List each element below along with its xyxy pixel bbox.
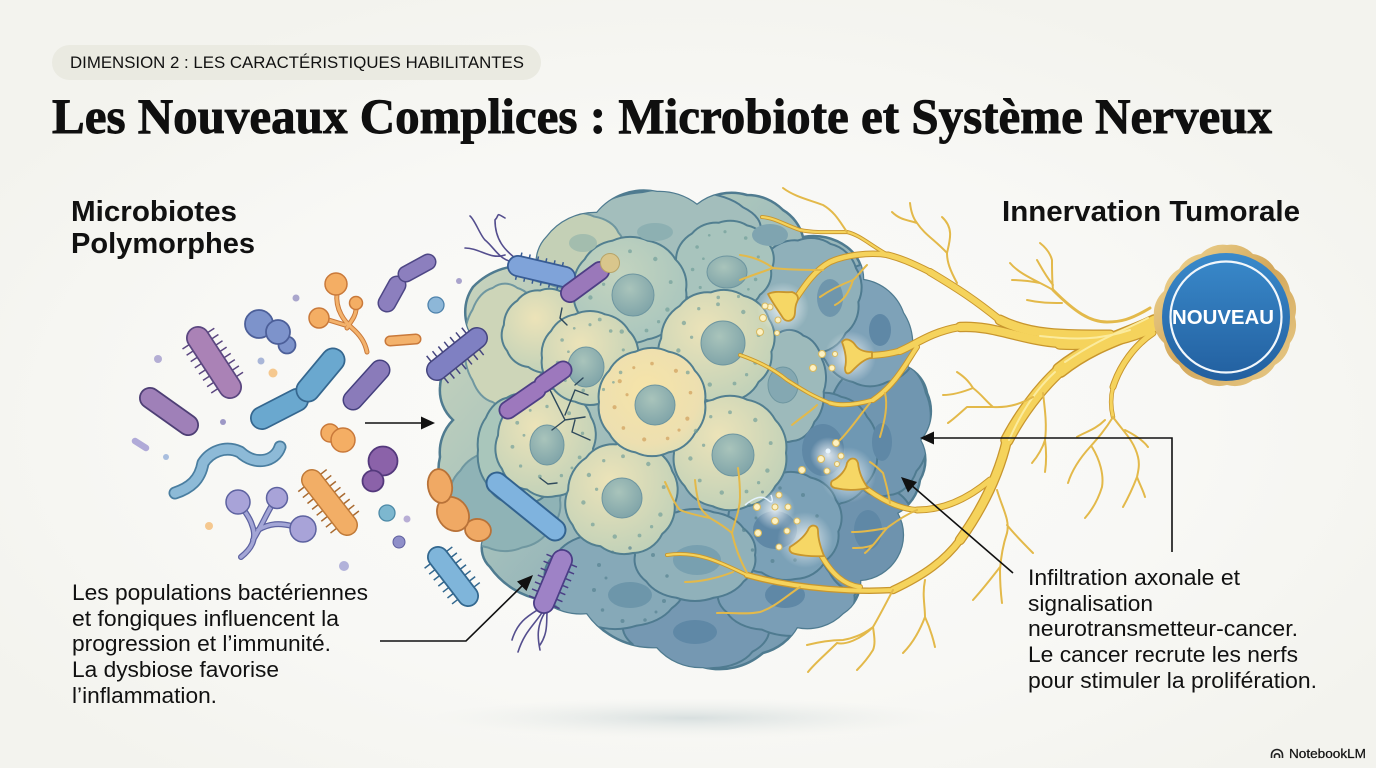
synapse glows [755,282,876,568]
purple rod on tumour [570,271,600,293]
nerve fill [667,217,1155,591]
text block: innervation: pour stimuler la prolifération. [1028,668,1317,693]
text block: microbiotes: Les populations bactériennes [72,580,368,605]
flagellated blue bacterium [465,215,565,277]
orange short rod [390,339,416,341]
spiky orange bacillus [312,480,347,525]
purple cocci [362,446,398,492]
arrow: right elbow to tumour [920,432,1172,552]
cell speckles [511,230,819,623]
text block: microbiotes: La dysbiose favorise [72,657,279,682]
notebooklm mark: NotebookLM [1289,746,1366,761]
microbes cloud [135,215,620,652]
spiky blue bacillus [438,557,468,596]
nerve outlines [667,217,1155,591]
cell nuclei [530,256,798,518]
arrow: microbes to tumour [365,416,435,430]
arrow: right text to tumour [901,477,1013,573]
text block: microbiotes: progression et l’immunité. [72,631,331,656]
purple double rod on tumour [508,370,563,410]
title: Les Nouveaux Complices : Microbiote et Système Nerveux [52,88,1272,144]
purple bacillus [150,398,188,425]
tumour cells [478,221,786,554]
dark outer cells [450,189,931,669]
dark nuclei [569,223,892,644]
spiky purple bacillus [198,338,230,387]
ground shadow [430,698,950,738]
section tag pill: DIMENSION 2 : LES CARACTÉRISTIQUES HABILITANTES [70,53,524,72]
heading: innervation: Innervation Tumorale [1002,196,1300,228]
badge: nouveau: NOUVEAU [1172,307,1274,329]
blue long rod [497,483,555,530]
heading: microbiotes: Microbiotes [71,196,237,228]
blue double rod [262,360,333,418]
nerves [665,188,1155,672]
flagellated purple bacterium [512,560,562,652]
wavy blue spirochete [175,447,280,493]
text block: microbiotes: l’inflammation. [72,683,217,708]
spiky indigo bacillus [437,338,477,370]
badge: nouveau [1154,245,1296,386]
orange chain [425,467,493,543]
blue cocci [245,310,296,354]
two-segment violet rods [387,262,428,303]
arrow: left text to microbe [380,575,533,641]
section tag pill [52,45,541,80]
tan spore [600,254,620,272]
nerve terminals [768,292,872,556]
heading: microbiotes: Polymorphes [71,228,255,260]
nerve sprigs [665,188,1150,672]
text block: innervation: signalisation [1028,591,1153,616]
violet rod [353,370,380,400]
text block: microbiotes: et fongiques influencent la [72,606,339,631]
tumour mass [439,189,931,669]
orange fungi [309,273,367,352]
orange cocci [321,424,355,452]
neurotransmitter dots [754,303,844,550]
tumour outer body [439,191,931,669]
nerve highlights [1009,318,1148,440]
cracks [540,308,590,484]
microbe dots [135,278,462,571]
lilac fungi [226,488,316,557]
text block: innervation: Infiltration axonale et [1028,565,1241,590]
signal sparks [745,448,830,505]
text block: innervation: Le cancer recrute les nerfs [1028,642,1298,667]
text block: innervation: neurotransmetteur-cancer. [1028,616,1298,641]
